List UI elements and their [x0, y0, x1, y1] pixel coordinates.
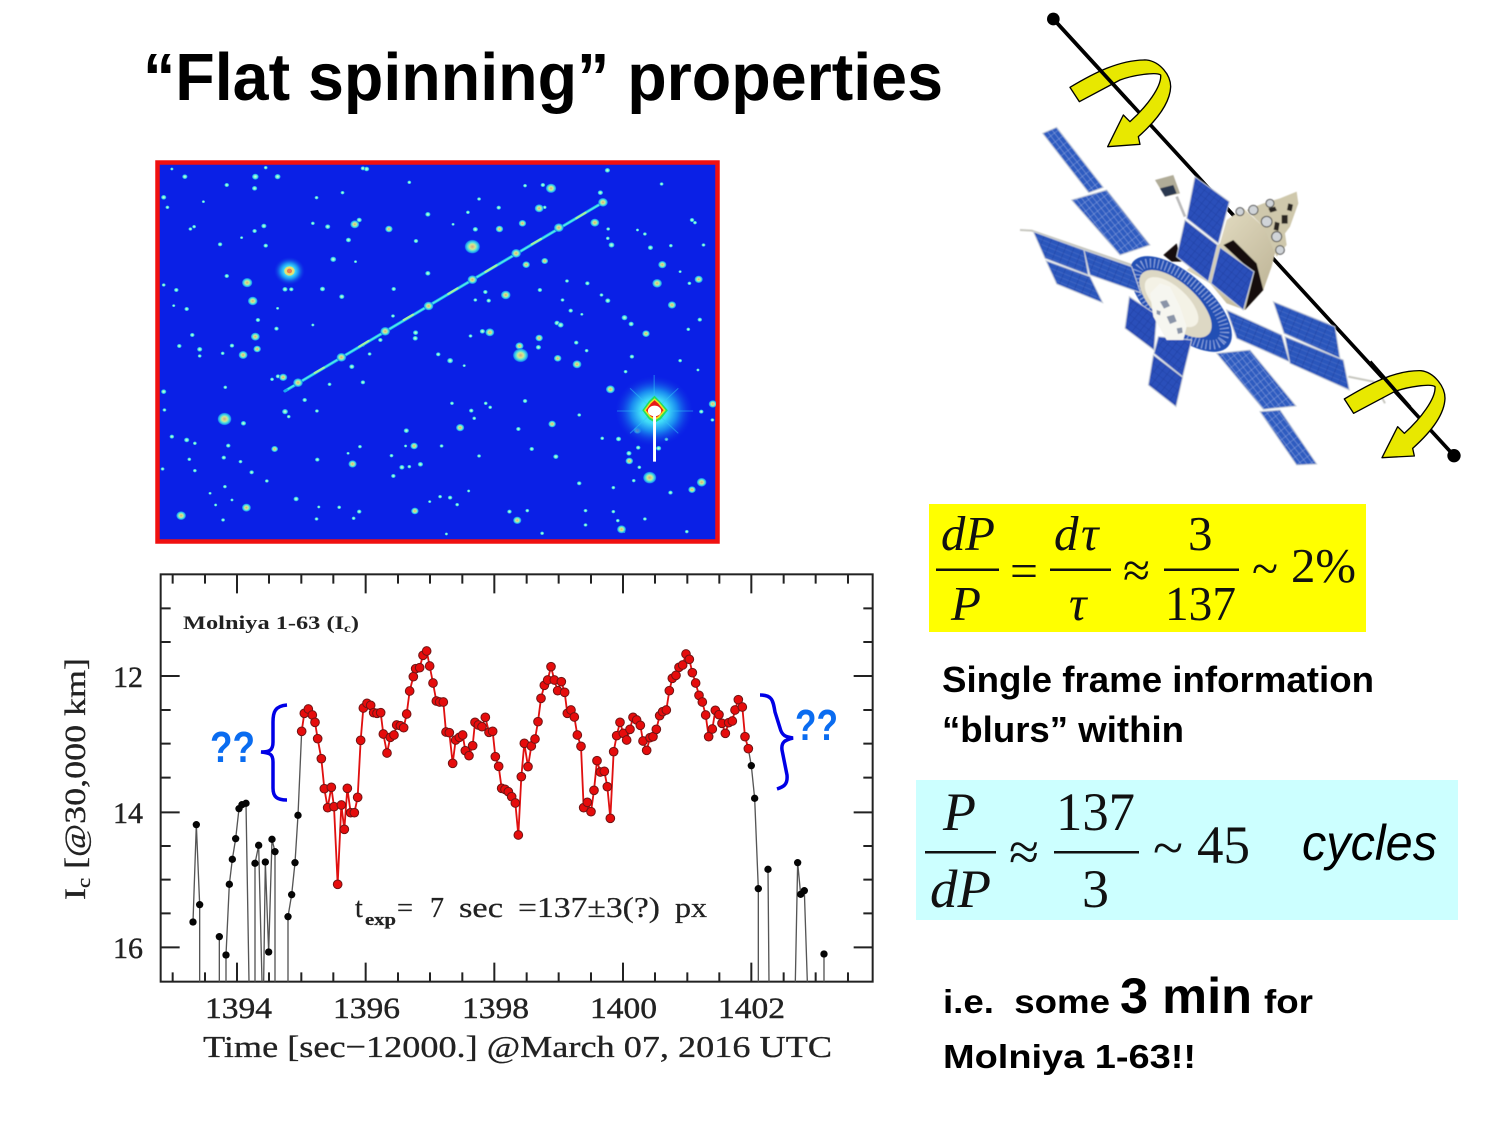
equation box: blur cycle count: dP — [930, 859, 991, 919]
equation box: period change fraction: τ — [1069, 576, 1089, 631]
chart frame and ticks — [161, 574, 873, 982]
equation box: period change fraction: P — [950, 576, 981, 631]
equation box: period change fraction: d — [1054, 506, 1079, 561]
y axis title: c — [74, 878, 95, 888]
equation box: blur cycle count: ≈ — [1009, 822, 1039, 882]
callout: right brace with question marks — [760, 695, 838, 789]
equation box: blur cycle count: 137 — [1056, 782, 1135, 842]
chart label: object name: c — [344, 621, 352, 635]
solar panels — [1033, 127, 1349, 465]
satellite streak — [285, 198, 608, 391]
small stars — [160, 166, 715, 536]
text block: single frame information: Single frame information — [942, 659, 1374, 700]
callout: left brace with question marks: ?? — [210, 723, 255, 772]
y axis tick labels — [113, 661, 143, 965]
equation box: period change fraction: 3 — [1188, 506, 1212, 561]
chart annotation: exposure time — [355, 893, 707, 929]
equation box: period change fraction: ~ — [1252, 540, 1278, 596]
chart annotation: exposure time: 7 — [430, 893, 444, 924]
text block: duration conclusion — [943, 968, 1313, 1075]
ringed stars — [176, 183, 717, 534]
chart label: object name: Molniya 1-63 (I — [183, 613, 309, 634]
medium glow star — [276, 258, 304, 284]
y axis tick labels: 16 — [113, 932, 143, 965]
panel: Molniya 1-63 light curve chart — [59, 504, 1458, 1075]
bright saturated star — [615, 375, 693, 462]
text block: duration conclusion: 3 min — [1120, 968, 1252, 1024]
chart annotation: exposure time: t — [355, 893, 363, 924]
y axis title: [@30,000 km] — [59, 658, 92, 878]
radiator dish — [1114, 240, 1248, 368]
equation box: period change fraction: τ — [1081, 506, 1101, 561]
equation box: blur cycle count: 45 — [1197, 815, 1250, 875]
equation box: blur cycle count — [916, 780, 1458, 920]
equation box: period change fraction — [929, 504, 1366, 632]
x axis tick labels: 1400 — [590, 992, 657, 1025]
chart label: object name: ) — [351, 613, 359, 634]
callout: right brace with question marks: ?? — [795, 701, 838, 750]
icon: upper yellow rotation arrow — [1053, 19, 1171, 147]
equation box: blur cycle count: P — [942, 782, 976, 842]
y axis tick labels: 12 — [113, 661, 143, 694]
panel: star field image with satellite streak — [158, 162, 718, 542]
equation box: period change fraction: 2% — [1291, 538, 1356, 593]
chart annotation: exposure time: = — [397, 893, 413, 924]
x axis tick labels: 1394 — [205, 992, 272, 1025]
text block: single frame information: “blurs” within — [942, 709, 1184, 750]
x axis tick labels: 1398 — [462, 992, 529, 1025]
equation box: blur cycle count: 3 — [1082, 859, 1109, 919]
chart annotation: exposure time: =137±3(?) — [518, 893, 660, 924]
equation box: blur cycle count: cycles — [1302, 815, 1437, 871]
equation box: period change fraction: ≈ — [1123, 542, 1150, 598]
title: “Flat spinning” properties — [143, 40, 943, 115]
callout: left brace with question marks — [210, 705, 287, 800]
text block: duration conclusion: for — [1264, 983, 1313, 1020]
red in-window data series — [297, 647, 753, 889]
chart annotation: exposure time: exp — [365, 910, 396, 929]
icon: lower yellow rotation arrow — [1344, 362, 1445, 458]
x axis tick labels — [205, 992, 785, 1025]
y axis title: I — [59, 890, 92, 900]
equation box: period change fraction: dP — [941, 506, 995, 561]
equation box: period change fraction: 137 — [1165, 576, 1236, 631]
x axis tick labels: 1402 — [718, 992, 785, 1025]
chart annotation: exposure time: sec — [459, 893, 503, 924]
y axis tick labels: 14 — [113, 797, 143, 830]
instrument cluster — [1150, 283, 1187, 340]
chart annotation: exposure time: px — [675, 893, 707, 924]
equation box: blur cycle count: ~ — [1153, 818, 1183, 878]
x axis title: Time [sec−12000.] @March 07, 2016 UTC — [203, 1029, 832, 1064]
text block: duration conclusion: Molniya 1-63!! — [943, 1038, 1196, 1075]
illustration: Molniya satellite — [1020, 127, 1385, 465]
rotation axis line — [1047, 13, 1461, 462]
text block: single frame information — [942, 659, 1374, 750]
black out-of-window points — [189, 731, 828, 982]
equation box: period change fraction: = — [1010, 545, 1038, 598]
spacecraft body — [1020, 175, 1385, 403]
text block: duration conclusion: i.e. some — [943, 983, 1110, 1020]
x axis tick labels: 1396 — [333, 992, 400, 1025]
